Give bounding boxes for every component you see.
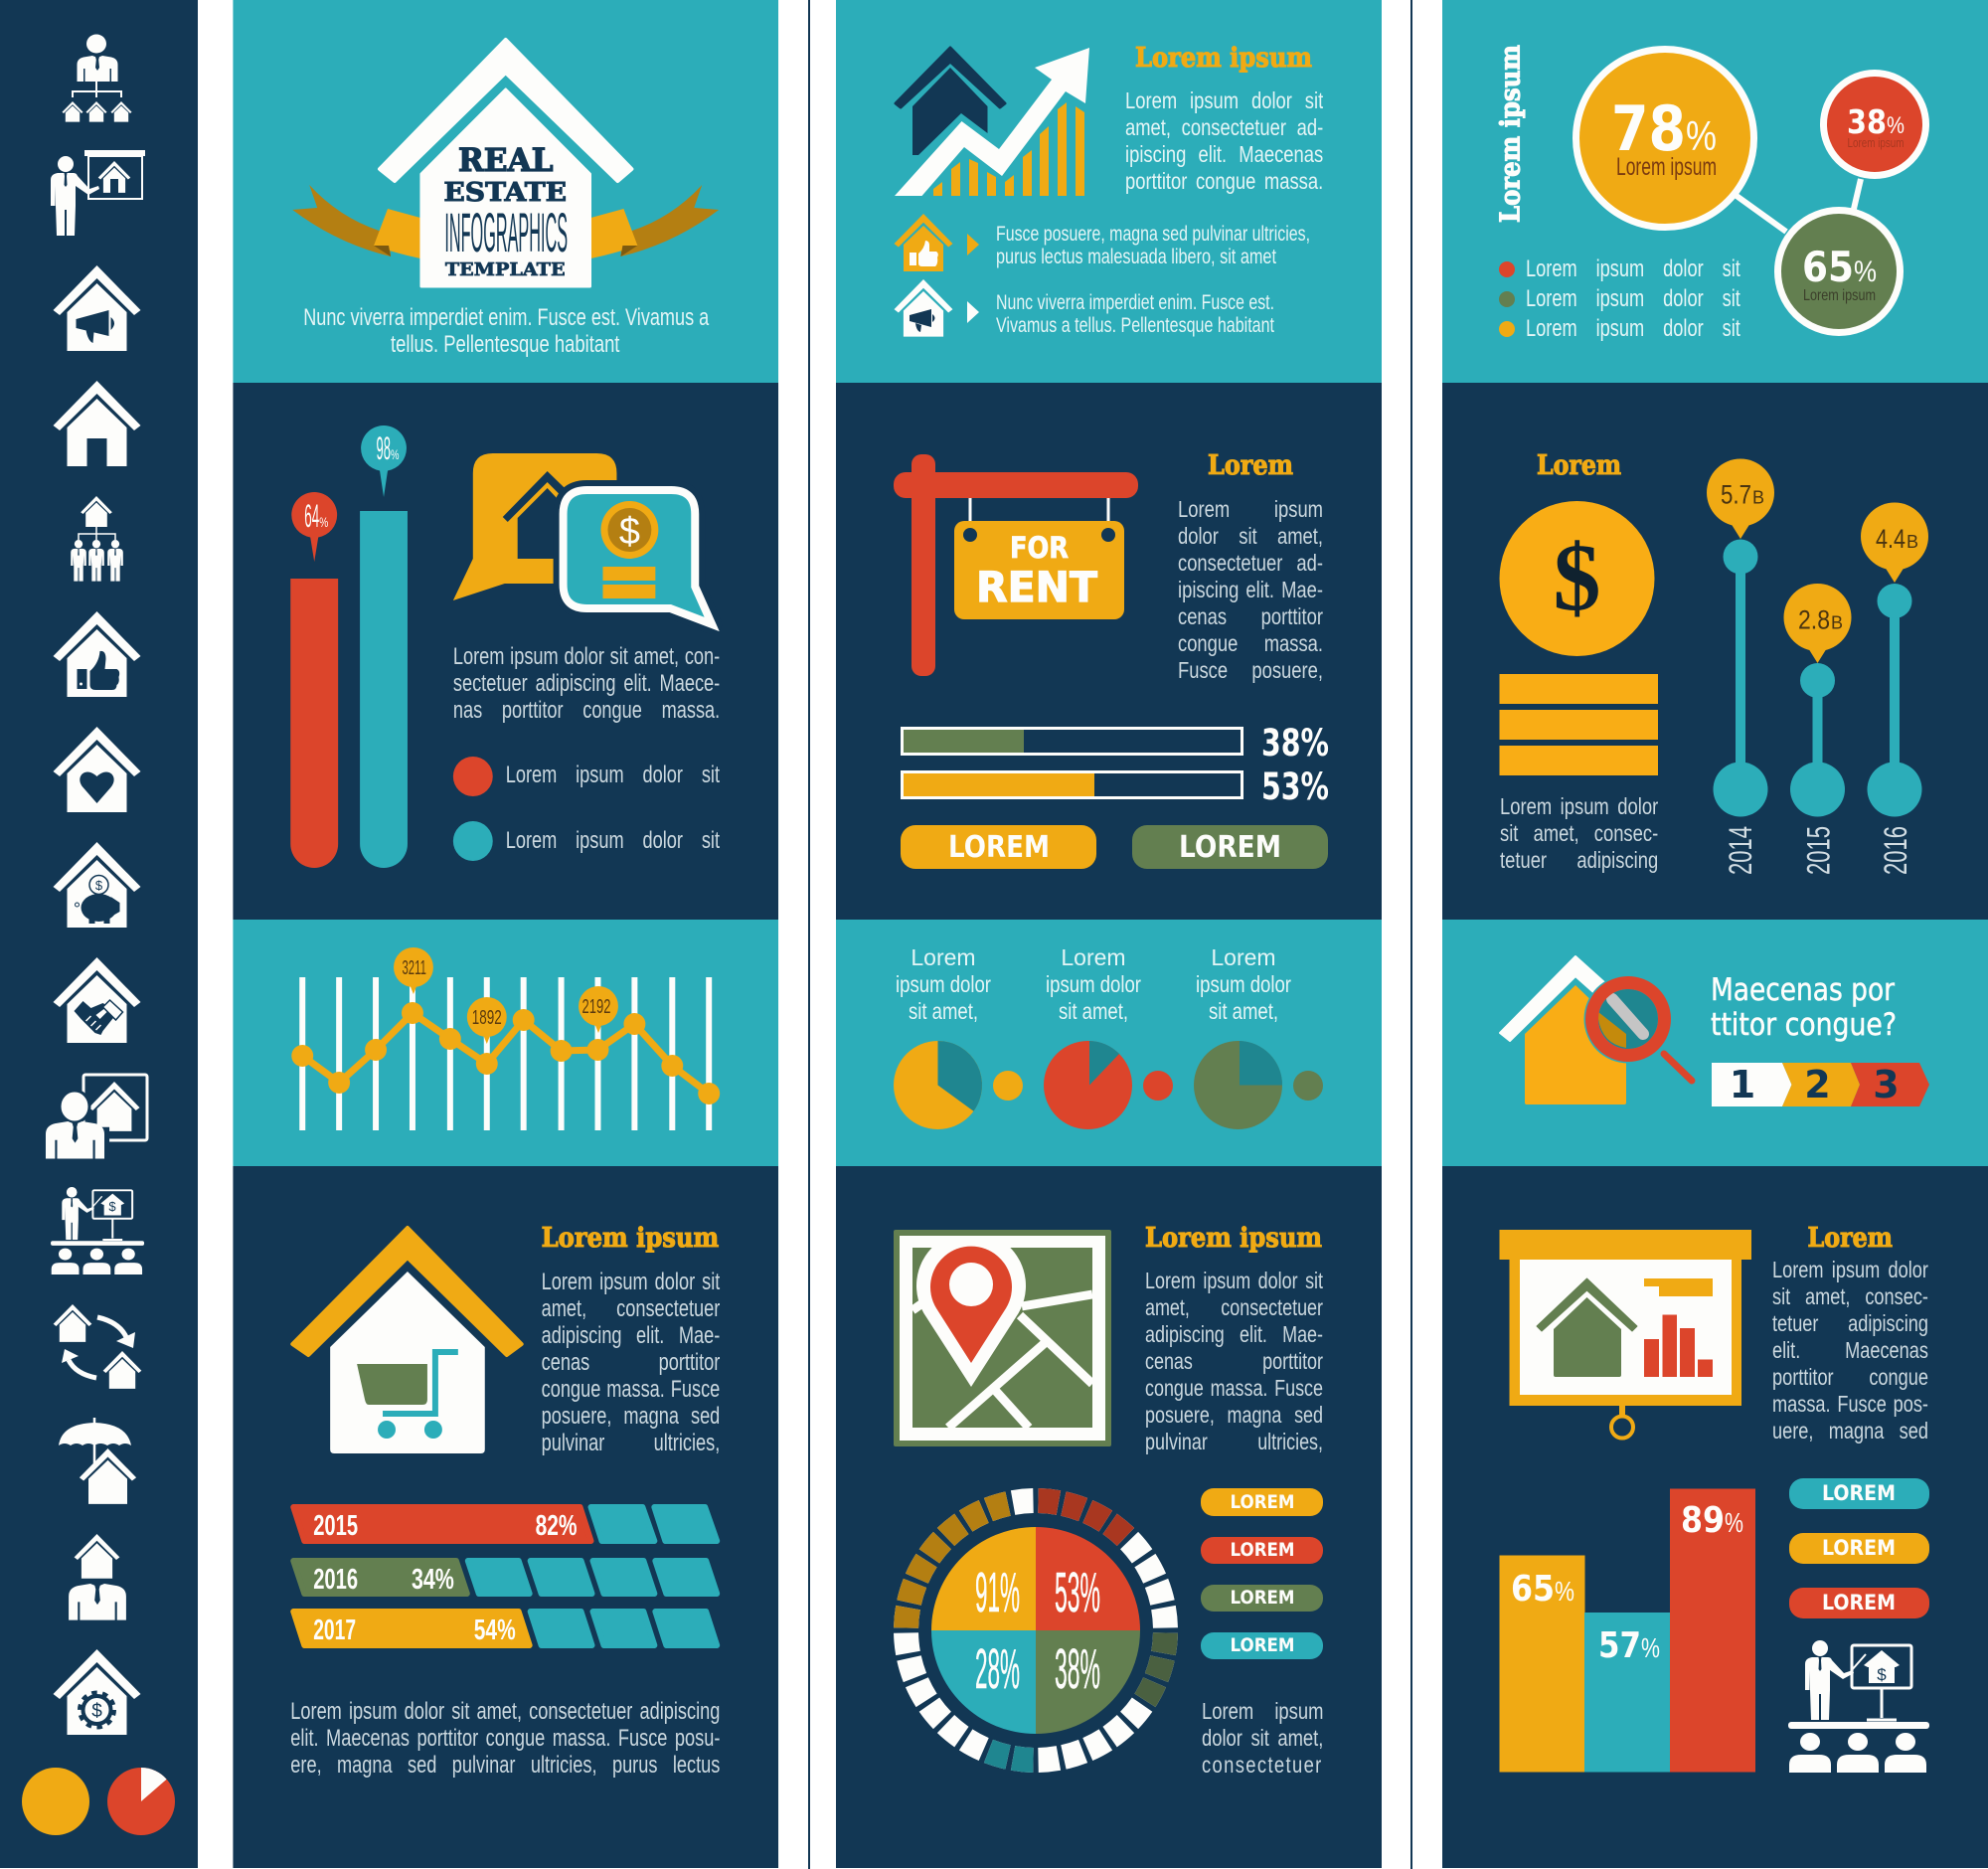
callout 1892 [467, 997, 507, 1044]
icon: umbrella over house [59, 1418, 136, 1504]
tube bar teal 98%: % [391, 446, 399, 462]
list item: thumbs up: purus lectus malesuada libero, sit amet [996, 246, 1276, 268]
paragraph: dolor sit amet, [1178, 523, 1323, 549]
legend: Lorem ipsum dolor sit [1526, 255, 1740, 282]
paragraph: Lorem ipsum dolor [1772, 1257, 1928, 1282]
icon: dollar speech bubble: $ [619, 511, 640, 553]
panel: icon sidebar [0, 0, 198, 1868]
heading: Lorem ipsum [1135, 43, 1312, 74]
progress row 2015: 2015 [313, 1510, 358, 1542]
lollipop 2014 [1707, 459, 1774, 875]
house emblem [380, 40, 631, 286]
paragraph: massa. Fusce pos- [1772, 1390, 1928, 1416]
icon: house under magnifier [1500, 956, 1692, 1104]
icon: presenter with house board [51, 150, 145, 236]
paragraph: posuere, magna sed [542, 1403, 720, 1430]
legend: Lorem ipsum dolor sit [506, 762, 720, 788]
icon: house with megaphone [54, 265, 141, 351]
panel: line chart [233, 920, 778, 1166]
button green: LOREM [1179, 830, 1281, 865]
progress row 2017 [293, 1612, 717, 1646]
legend pills: LOREM [1231, 1587, 1294, 1609]
subtitle: Nunc viverra imperdiet enim. Fusce est. Vivamus a [303, 304, 710, 331]
heading: Lorem ipsum [542, 1223, 719, 1254]
bar chart: % [1725, 1507, 1743, 1538]
icon: house with dollar gear [54, 1649, 141, 1735]
icon: presenter with audience [1788, 1640, 1929, 1773]
icon: house with door [54, 381, 141, 466]
icon: house with handshake [54, 957, 141, 1043]
bubble 38% [1823, 74, 1926, 175]
paragraph: Lorem ipsum dolor sit amet, con- [453, 643, 720, 670]
heading: Lorem [1807, 1223, 1893, 1254]
step chevrons: 1 [1730, 1063, 1755, 1106]
paragraph: amet, consectetuer ad- [1125, 113, 1323, 139]
legend pills: LOREM [1822, 1536, 1896, 1560]
icon: houses exchange cycle [54, 1304, 141, 1389]
pie 3: ipsum dolor [1196, 971, 1291, 997]
list item: megaphone: Vivamus a tellus. Pellentesque habitant [996, 314, 1274, 337]
bar chart: 65 [1511, 1569, 1555, 1610]
paragraph: dolor sit amet, [1201, 1724, 1323, 1750]
lollipop 2015 [1783, 584, 1851, 875]
button orange [901, 825, 1096, 869]
icon: presenter with audience: $ [1877, 1665, 1887, 1684]
paragraph [453, 643, 720, 733]
icon: presenter with audience: $ [108, 1199, 116, 1214]
pie 2: sit amet, [1059, 998, 1128, 1024]
paragraph: tetuer adipiscing [1772, 1310, 1928, 1336]
icon: for rent sign: RENT [976, 563, 1097, 611]
icon: orange bars [933, 102, 1084, 196]
pie 3: sit amet, [1209, 998, 1278, 1024]
icon: red pie [107, 1768, 175, 1835]
legend pills: LOREM [1231, 1491, 1294, 1513]
paragraph: congue massa. [1178, 630, 1323, 656]
paragraph: posuere, magna sed [1145, 1402, 1323, 1428]
progress bar 38%: 38% [1261, 722, 1329, 765]
paragraph: amet, consectetuer [542, 1295, 720, 1322]
callout 2192 [579, 986, 618, 1033]
progress row 2016: 2016 [313, 1564, 358, 1596]
button green [1132, 825, 1328, 869]
lollipop 2014: 5.7 [1721, 479, 1751, 509]
lollipop 2014: 2014 [1723, 826, 1758, 875]
paragraph: Lorem ipsum dolor sit [1145, 1267, 1323, 1292]
icon: agent org chart with houses [62, 34, 132, 122]
progress row 2017: 54% [474, 1614, 516, 1646]
lollipop 2016: 2016 [1878, 826, 1913, 875]
paragraph [290, 1698, 720, 1787]
paragraph: Lorem ipsum dolor sit [542, 1269, 720, 1295]
legend: Lorem ipsum dolor sit [1526, 285, 1740, 312]
lollipop 2016: B [1906, 532, 1918, 552]
icon: navy house [896, 48, 1005, 155]
icon: house with shopping cart [292, 1228, 522, 1453]
bar chart: % [1555, 1576, 1574, 1607]
step chevrons [1712, 1063, 1929, 1106]
progress row 2015 [293, 1507, 717, 1542]
callout 2192: 2192 [582, 996, 610, 1018]
bar chart [1499, 1489, 1755, 1772]
paragraph: elit. Maecenas [1772, 1336, 1928, 1362]
paragraph: pulvinar ultricies, [1145, 1428, 1323, 1453]
vertical heading: Lorem ipsum [1495, 45, 1527, 223]
paragraph: congue massa. Fusce [1145, 1374, 1323, 1400]
paragraph: Fusce posuere, [1178, 656, 1323, 682]
bubble 65%: 65 [1802, 243, 1854, 291]
paragraph: Lorem ipsum [1201, 1698, 1323, 1724]
pie 1: Lorem [911, 944, 976, 970]
panel: bubble stats [1442, 0, 1988, 383]
ring chart: 38% [1055, 1637, 1100, 1701]
legend: Lorem ipsum dolor sit [506, 827, 720, 854]
legend [453, 757, 720, 861]
panel: growth arrow [836, 0, 1382, 383]
callout 3211 [394, 947, 433, 994]
icon: dollar coin [1499, 501, 1654, 656]
bubble 38%: Lorem ipsum [1847, 135, 1905, 150]
panel: shopping house and progress [233, 1166, 778, 1868]
legend [1499, 255, 1740, 344]
arrow [895, 48, 1089, 196]
paragraph: adipiscing elit. Mae- [542, 1322, 720, 1349]
panel: presentation and bars [1442, 1166, 1988, 1868]
legend pills: LOREM [1231, 1634, 1294, 1656]
legend pills [1789, 1478, 1929, 1618]
progress bar 53% [903, 765, 1329, 808]
bubble 78%: Lorem ipsum [1616, 153, 1717, 181]
paragraph: Lorem ipsum dolor sit amet, consectetuer adipiscing [290, 1698, 720, 1725]
pie 3: Lorem [1211, 944, 1276, 970]
progress row 2016: 34% [412, 1564, 454, 1596]
progress row 2016 [293, 1561, 717, 1596]
subtitle: tellus. Pellentesque habitant [391, 331, 620, 358]
icon: dollar speech bubble [564, 490, 712, 624]
paragraph: consectetuer [1201, 1752, 1322, 1778]
lollipop 2015: 2015 [1801, 826, 1837, 875]
progress bar 53%: 53% [1261, 765, 1329, 808]
panel: map and ring chart [836, 1166, 1382, 1868]
paragraph: porttitor congue massa. [1125, 167, 1323, 193]
bar chart: 57 [1598, 1625, 1641, 1666]
heading: Lorem [1208, 450, 1293, 481]
pie 1: ipsum dolor [896, 971, 991, 997]
callout 3211: 3211 [402, 957, 426, 979]
bubble 38%: 38 [1847, 102, 1887, 141]
panel: for rent [836, 383, 1382, 920]
heading: Lorem [1537, 450, 1621, 481]
question text: ttitor congue? [1711, 1007, 1897, 1043]
lollipop 2014: B [1752, 487, 1764, 507]
pie 1: sit amet, [909, 998, 978, 1024]
lollipop 2016: 4.4 [1876, 524, 1905, 554]
list item: thumbs up: Fusce posuere, magna sed pulvinar ultricies, [996, 223, 1310, 246]
question text: Maecenas por [1711, 972, 1895, 1008]
paragraph: elit. Maecenas porttitor congue massa. Fusce posu- [290, 1725, 720, 1752]
paragraph: ere, magna sed pulvinar ultricies, purus lectus [290, 1752, 720, 1779]
ring chart: 28% [975, 1637, 1020, 1701]
paragraph [1499, 793, 1658, 883]
paragraph: adipiscing elit. Mae- [1145, 1320, 1323, 1346]
paragraph [1772, 1257, 1928, 1451]
ribbon right [591, 185, 719, 258]
tube bar red 64%: 64 [304, 498, 319, 534]
paragraph: ipiscing elit. Mae- [1178, 577, 1323, 602]
panel: title block: INFOGRAPHICS [444, 201, 568, 263]
bubble 78% [1576, 50, 1753, 227]
paragraph: congue massa. Fusce [542, 1376, 720, 1403]
panel: pie charts [836, 920, 1382, 1166]
paragraph: amet, consectetuer [1145, 1294, 1323, 1320]
paragraph: ipiscing elit. Maecenas [1125, 141, 1323, 167]
tube bar red 64%: % [319, 514, 328, 530]
panel: title block [233, 0, 778, 383]
progress row 2015: 82% [536, 1510, 578, 1542]
pie 1 [894, 944, 1023, 1129]
tube bar red 64% [290, 492, 338, 868]
paragraph: sit amet, consec- [1772, 1282, 1928, 1308]
panel: coin and lollipop chart [1442, 383, 1988, 920]
bubble 78%: 78 [1611, 92, 1686, 165]
lollipop 2015: 2.8 [1798, 604, 1830, 634]
pie 2 [1044, 944, 1173, 1129]
icon: house with piggy bank: $ [95, 878, 103, 893]
paragraph [1178, 495, 1323, 690]
icon: dollar coin: $ [1553, 524, 1600, 630]
paragraph [1145, 1267, 1323, 1461]
bar chart: 89 [1681, 1500, 1725, 1541]
bubble 65% [1777, 211, 1901, 332]
tube bar teal 98% [360, 425, 408, 868]
legend pills: LOREM [1822, 1591, 1896, 1614]
heading: Lorem ipsum [1145, 1223, 1322, 1254]
icon: house with dollar gear: $ [91, 1701, 102, 1722]
button orange: LOREM [948, 830, 1050, 865]
legend pills: LOREM [1822, 1481, 1896, 1505]
panel: search house question [1442, 920, 1988, 1166]
icon: agent with house frame [41, 1075, 147, 1160]
ring chart [907, 1501, 1165, 1760]
data line [291, 1002, 720, 1104]
lollipop 2015: B [1831, 612, 1843, 632]
paragraph: Lorem ipsum [1178, 495, 1323, 521]
callout 1892: 1892 [472, 1007, 502, 1029]
pie 2: Lorem [1061, 944, 1126, 970]
legend: Lorem ipsum dolor sit [1526, 315, 1740, 342]
title: ESTATE [443, 178, 567, 208]
pie 3 [1194, 944, 1323, 1129]
ring chart: 53% [1055, 1561, 1100, 1624]
ribbon left [292, 185, 420, 258]
paragraph: sit amet, consec- [1499, 819, 1658, 845]
paragraph [1125, 87, 1323, 203]
paragraph: tetuer adipiscing [1499, 847, 1658, 873]
paragraph: cenas porttitor [542, 1349, 720, 1376]
icon: orange circle [22, 1768, 89, 1835]
paragraph: cenas porttitor [1178, 602, 1323, 628]
panel: tube chart and speech bubbles [233, 383, 778, 920]
paragraph: Lorem ipsum dolor sit [1125, 87, 1323, 113]
title: REAL [458, 141, 554, 179]
icon: house with heart [54, 727, 141, 812]
icon: map with pin [894, 1230, 1111, 1446]
tube bar teal 98%: 98 [377, 430, 391, 466]
icon: agent with house head [69, 1534, 126, 1620]
icon: for rent sign: FOR [1010, 531, 1069, 565]
progress bar 38% [903, 722, 1329, 765]
icon: house with thumb up [54, 611, 141, 697]
question text [1711, 972, 1897, 1043]
icon: for rent sign [894, 454, 1138, 676]
icon: house with piggy bank [54, 842, 141, 928]
progress row 2017: 2017 [313, 1614, 356, 1646]
title: TEMPLATE [445, 259, 566, 280]
subtitle [303, 304, 710, 358]
icon: coin stack bars [1499, 674, 1658, 775]
title [443, 141, 568, 280]
icon: house above team [71, 496, 123, 582]
pie 2: ipsum dolor [1046, 971, 1141, 997]
legend pills [1201, 1488, 1323, 1659]
bubble 78%: % [1686, 112, 1717, 159]
paragraph [1201, 1698, 1323, 1787]
paragraph: cenas porttitor [1145, 1348, 1323, 1374]
step chevrons: 2 [1804, 1063, 1831, 1106]
paragraph: uere, magna sed [1772, 1418, 1928, 1444]
list item: thumbs up [895, 214, 1310, 271]
bar chart: % [1641, 1632, 1660, 1663]
paragraph: consectetuer ad- [1178, 549, 1323, 575]
paragraph: porttitor congue [1772, 1364, 1928, 1390]
list item: megaphone: Nunc viverra imperdiet enim. Fusce est. [996, 291, 1274, 314]
bubble 65%: % [1854, 255, 1877, 288]
paragraph: pulvinar ultricies, [542, 1430, 720, 1456]
bubble 38%: % [1887, 112, 1905, 139]
icon: house speech bubble [453, 453, 616, 600]
list item: megaphone [895, 279, 1274, 337]
paragraph: Lorem ipsum dolor [1499, 793, 1658, 819]
legend pills: LOREM [1231, 1539, 1294, 1561]
step chevrons: 3 [1873, 1063, 1900, 1106]
icon: projection screen [1499, 1230, 1751, 1438]
paragraph [542, 1269, 720, 1463]
icon: presenter with audience [51, 1187, 144, 1274]
bubble 65%: Lorem ipsum [1803, 287, 1876, 304]
ring chart: 91% [975, 1561, 1020, 1624]
paragraph: sectetuer adipiscing elit. Maece- [453, 670, 720, 697]
paragraph: nas porttitor congue massa. [453, 697, 720, 724]
lollipop 2016 [1861, 503, 1928, 875]
